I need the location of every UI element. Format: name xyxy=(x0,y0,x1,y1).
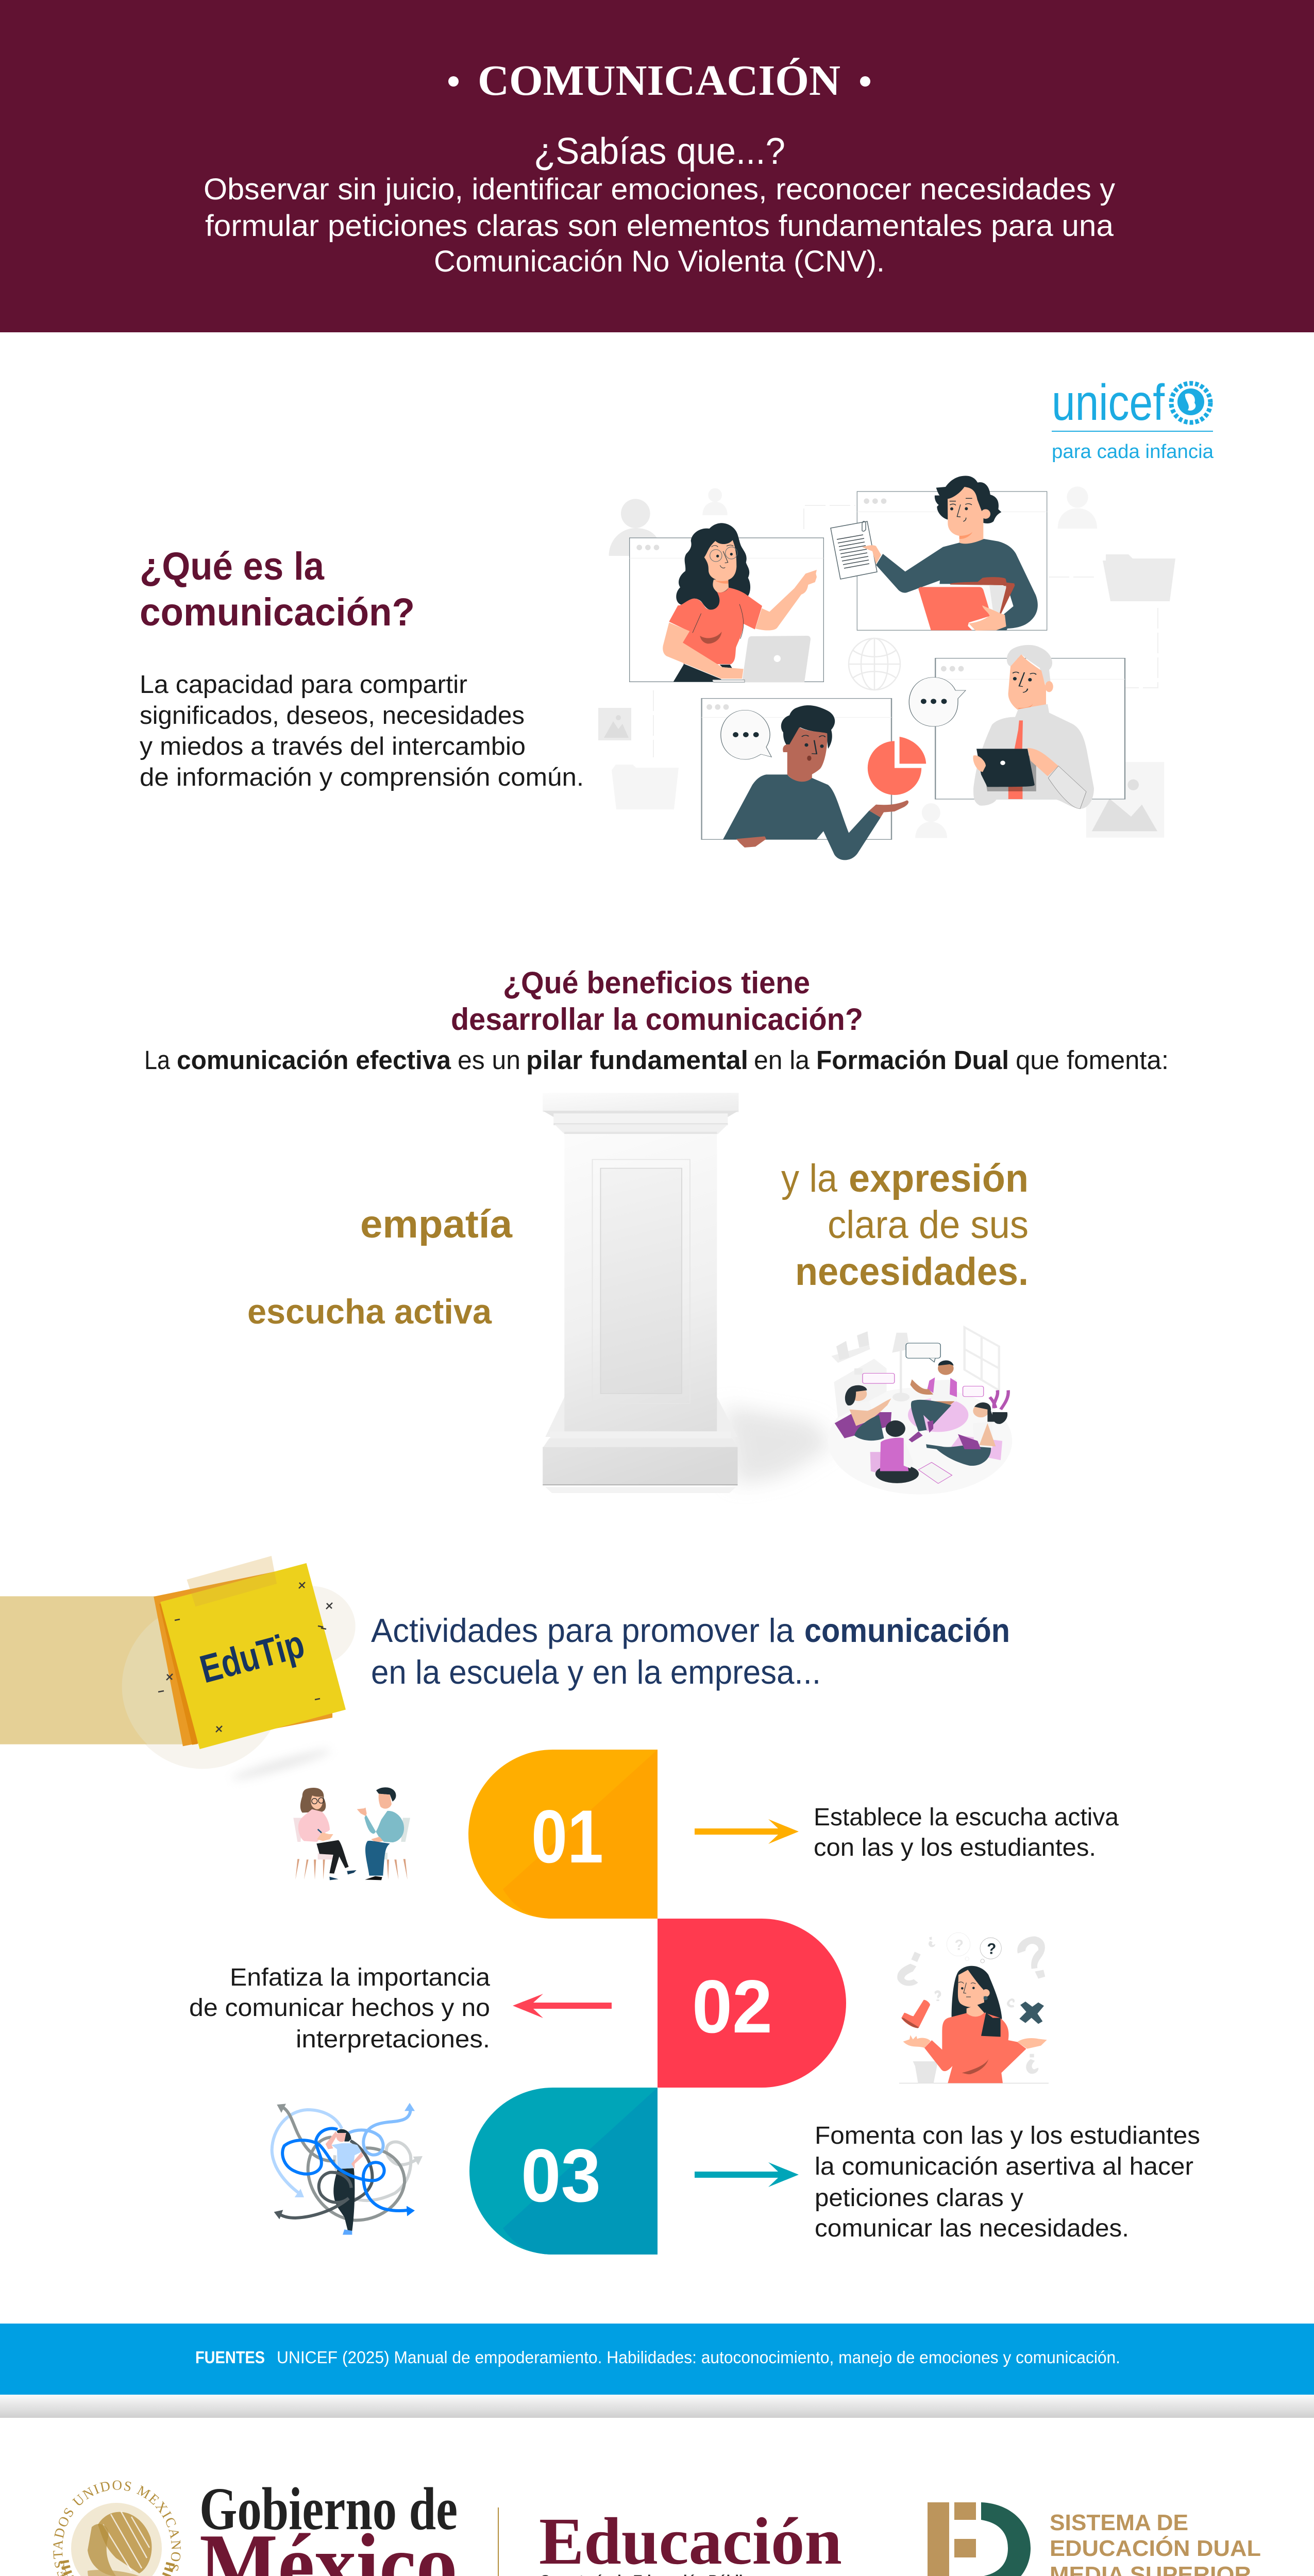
unicef logo: unicef xyxy=(1052,374,1165,431)
intro paragraph: Observar sin juicio, identificar emociones, reconocer necesidades y xyxy=(204,173,1115,206)
arrow xyxy=(695,1819,799,1844)
pillar xyxy=(543,1093,831,1493)
step 03 shape xyxy=(469,2088,658,2255)
header band xyxy=(0,0,1314,332)
intro line: pilar fundamental: La xyxy=(144,1045,171,1075)
panel: man with pie chart xyxy=(702,645,1164,860)
step 02 text: interpretaciones. xyxy=(296,2026,490,2053)
title: COMUNICACIÓN xyxy=(478,57,840,105)
logo: gobierno de mexico wordmark: Gobierno de xyxy=(199,2475,458,2543)
definition paragraph: y miedos a través del intercambio xyxy=(140,733,526,760)
step 03 text: la comunicación asertiva al hacer xyxy=(815,2153,1193,2180)
shadow xyxy=(230,1746,332,1783)
intro line: pilar fundamental: que fomenta: xyxy=(1016,1045,1169,1075)
intro line: pilar fundamental: Formación Dual xyxy=(816,1045,1009,1075)
illustration: woman among tangled arrows xyxy=(272,2103,423,2235)
illustration: group conversation xyxy=(828,1327,1012,1495)
text: y la expresion clara: expresión xyxy=(849,1157,1029,1200)
text: y la expresion clara: necesidades. xyxy=(795,1250,1029,1294)
step 01 xyxy=(293,1750,1119,1919)
icon: ED mark xyxy=(928,2502,1031,2576)
illustration: two people talking xyxy=(293,1787,410,1880)
step 02 text xyxy=(189,1964,490,2053)
panel: woman with laptop xyxy=(609,488,823,682)
intro line: pilar fundamental: pilar fundamental xyxy=(526,1045,748,1075)
step 02 text: Enfatiza la importancia xyxy=(230,1964,490,1991)
sources band: UNICEF (2025) Manual de empoderamiento. Habilidades: autoconocimiento, manejo de emociones y comunicación. xyxy=(277,2348,1120,2367)
illustration: doubtful woman: ? xyxy=(955,1937,964,1954)
intro paragraph xyxy=(204,173,1115,278)
icon: globe xyxy=(849,638,900,690)
intro paragraph: Comunicación No Violenta (CNV). xyxy=(434,245,885,278)
heading: beneficios: ¿Qué beneficios tiene xyxy=(503,965,810,1000)
step 03 number: 03 xyxy=(521,2133,601,2217)
illustration: doubtful woman xyxy=(897,1933,1049,2083)
step 02 shape xyxy=(658,1919,846,2088)
note marks xyxy=(158,1582,332,1732)
panel: man with folder xyxy=(857,476,1097,631)
decorative blobs xyxy=(0,1556,356,1769)
definition paragraph xyxy=(140,671,584,791)
definition paragraph: de información y comprensión común. xyxy=(140,764,584,791)
heading: que es la comunicacion xyxy=(140,545,415,634)
background icons xyxy=(598,505,1175,809)
edutip label: EduTip xyxy=(195,1622,309,1691)
step 02 number: 02 xyxy=(692,1964,772,2048)
step 02 xyxy=(189,1919,1049,2088)
step 01 text xyxy=(814,1804,1119,1861)
subtitle: ¿Sabías que...? xyxy=(534,131,785,172)
logo: sistema de educacion dual xyxy=(928,2502,1261,2576)
intro line: pilar fundamental: en la xyxy=(754,1045,810,1075)
heading: actividades xyxy=(371,1612,1010,1691)
text: escucha activa: escucha activa xyxy=(247,1292,492,1331)
intro line: pilar fundamental: es un xyxy=(458,1045,520,1075)
step 03 text: peticiones claras y xyxy=(815,2184,1023,2212)
text: y la expresion clara xyxy=(781,1157,1029,1294)
heading: que es la comunicacion: comunicación? xyxy=(140,590,415,634)
definition paragraph: significados, deseos, necesidades xyxy=(140,702,525,730)
sources band xyxy=(0,2324,1314,2418)
heading: beneficios xyxy=(451,965,863,1037)
logo: sistema de educacion dual: EDUCACIÓN DUAL xyxy=(1050,2535,1261,2561)
step 03 text: Fomenta con las y los estudiantes xyxy=(815,2122,1200,2149)
logo: gobierno de mexico wordmark xyxy=(199,2475,458,2576)
text: y la expresion clara: clara de sus xyxy=(828,1203,1029,1247)
step 02 text: de comunicar hechos y no xyxy=(189,1994,490,2022)
logo: sistema de educacion dual: SISTEMA DE xyxy=(1050,2510,1188,2535)
text: y la expresion clara: y la xyxy=(781,1157,838,1200)
unicef logo xyxy=(1052,374,1214,463)
step 03 text xyxy=(815,2122,1200,2242)
unicef logo: para cada infancia xyxy=(1052,441,1214,463)
text: empatia: empatía xyxy=(360,1202,513,1246)
arrow xyxy=(695,2162,799,2187)
intro line: pilar fundamental: comunicación efectiva xyxy=(177,1045,451,1075)
step 03 text: comunicar las necesidades. xyxy=(815,2215,1129,2242)
paper held by man xyxy=(831,521,881,579)
step 01 text: Establece la escucha activa xyxy=(814,1804,1119,1831)
step 01 number: 01 xyxy=(531,1794,603,1878)
heading: actividades: comunicación xyxy=(804,1612,1010,1649)
heading: que es la comunicacion: ¿Qué es la xyxy=(140,545,325,588)
arrow xyxy=(513,1994,612,2018)
sources band: FUENTES xyxy=(195,2348,265,2367)
edutip banner xyxy=(0,1556,356,1783)
intro line: pilar fundamental xyxy=(144,1045,1169,1075)
heading: beneficios: desarrollar la comunicación? xyxy=(451,1002,863,1037)
intro paragraph: formular peticiones claras son elementos fundamentales para una xyxy=(205,209,1114,243)
step 01 text: con las y los estudiantes. xyxy=(814,1834,1096,1861)
definition paragraph: La capacidad para compartir xyxy=(140,671,467,699)
heading: actividades: Actividades para promover la xyxy=(371,1612,795,1649)
step 01 shape xyxy=(468,1750,658,1919)
illustration: doubtful woman: ? xyxy=(987,1940,996,1957)
icon: unicef globe xyxy=(1171,383,1210,422)
illustration: video call team xyxy=(598,476,1175,860)
heading: actividades: en la escuela y en la empresa... xyxy=(371,1653,821,1691)
step 03 xyxy=(272,2088,1200,2255)
